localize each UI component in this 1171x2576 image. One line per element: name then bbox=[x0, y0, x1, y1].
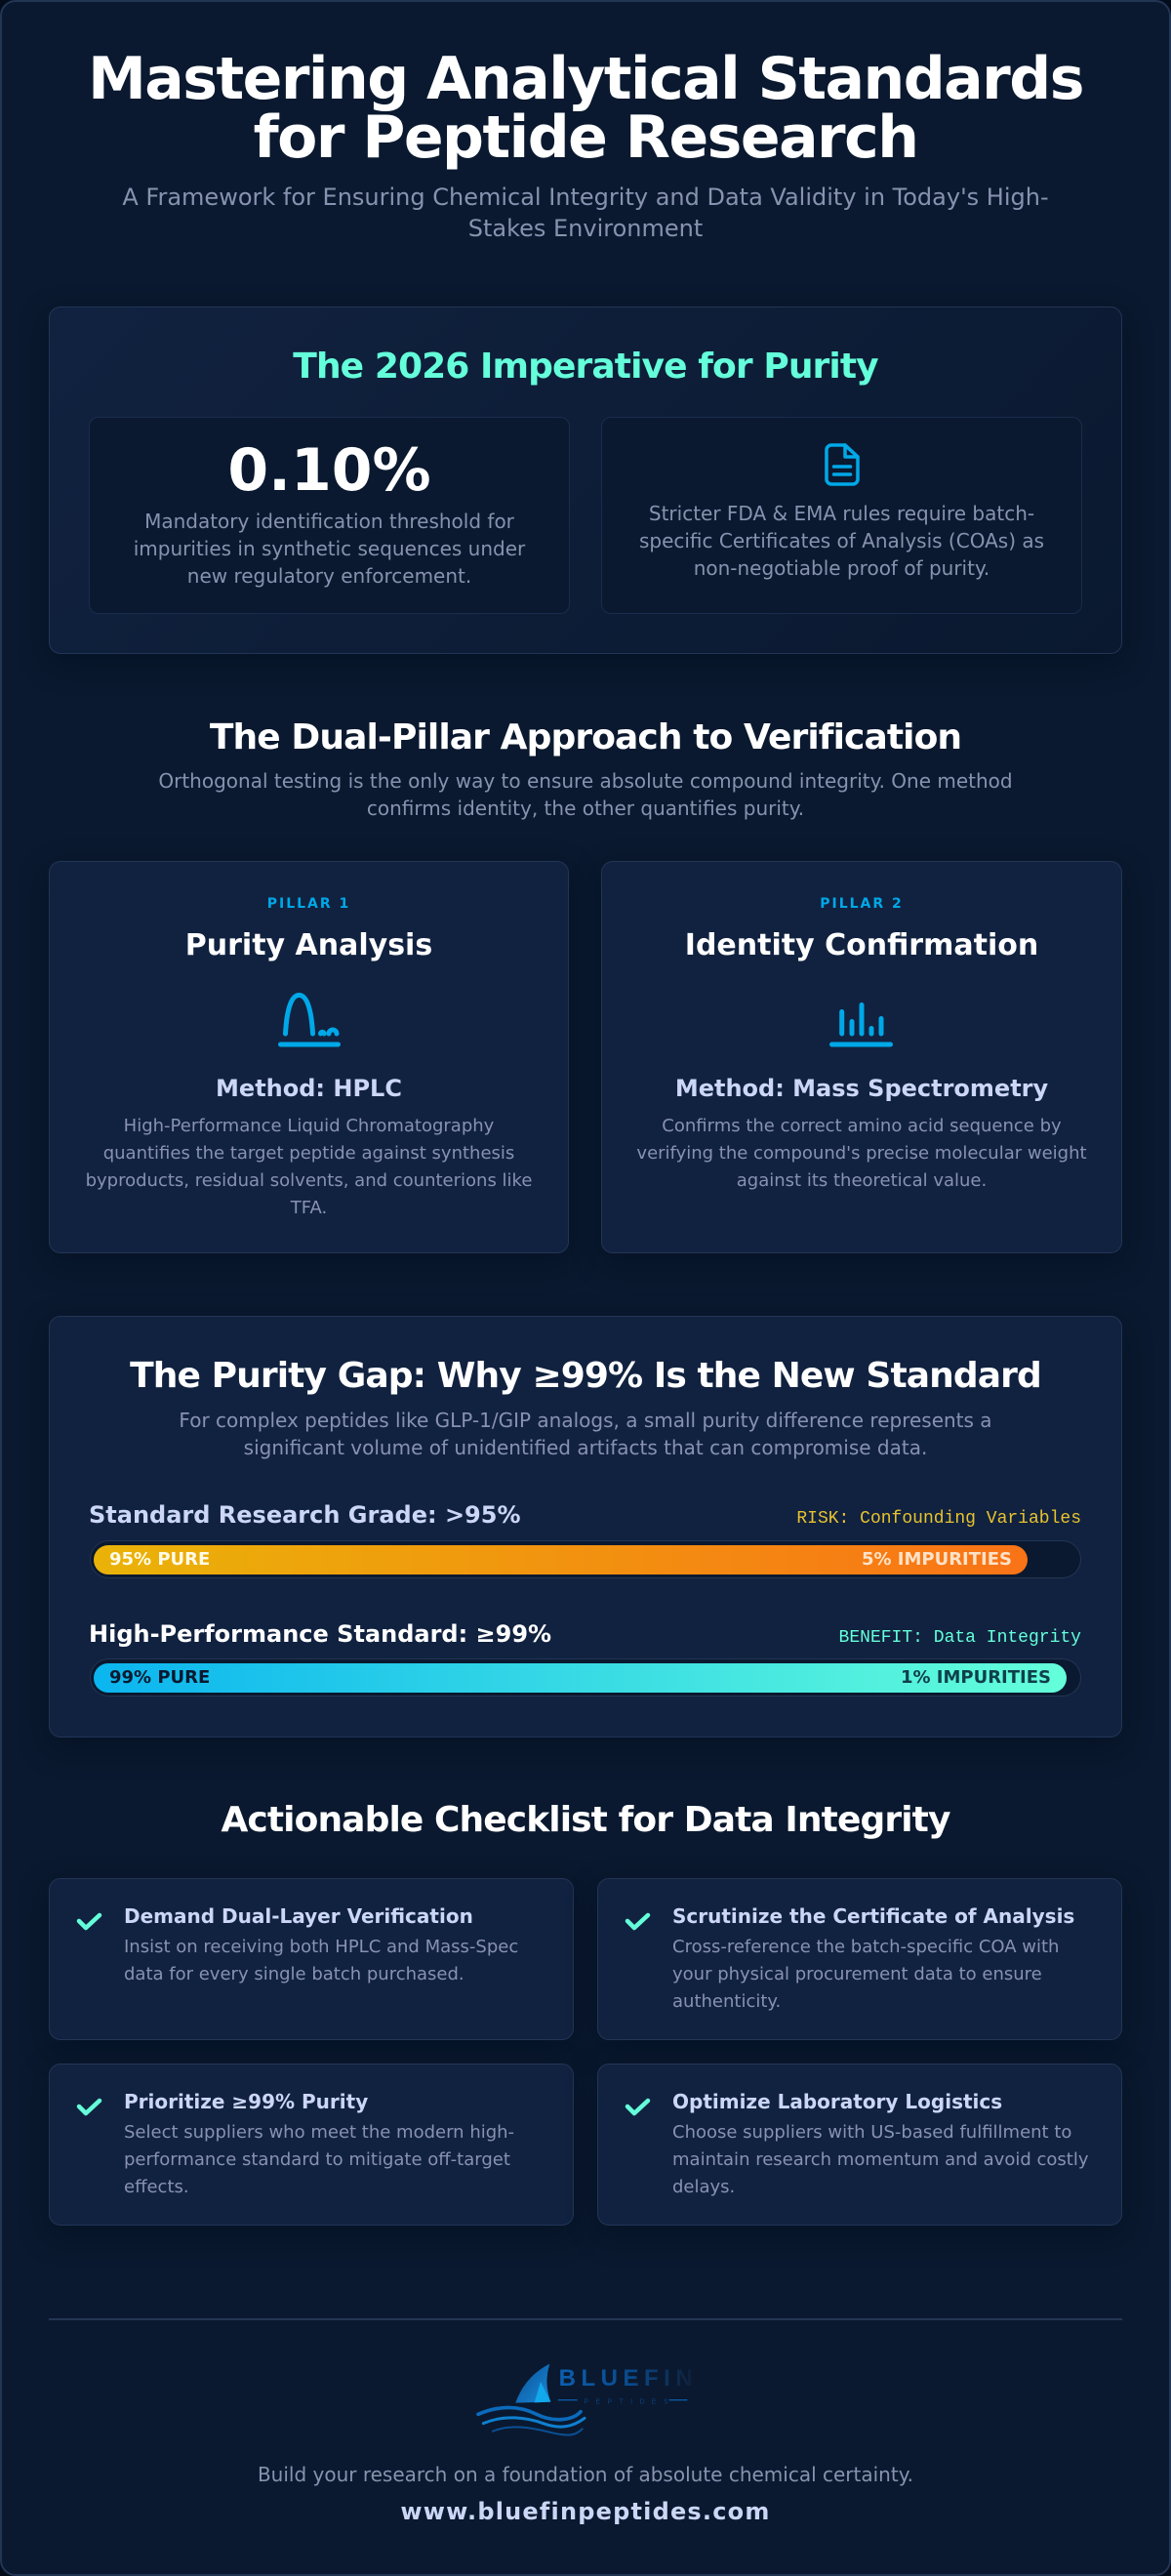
heading: identity confirmation: Identity Confirmation bbox=[685, 928, 1038, 962]
text: dual pillar intro: confirms identity, the other quantifies purity. bbox=[367, 797, 804, 820]
logo: Bluefin Peptides bbox=[476, 2364, 698, 2436]
text: COA description bbox=[639, 502, 1044, 580]
label: standard research grade: Standard Research Grade: >95% bbox=[89, 1501, 521, 1529]
checklist card: certificate of analysis bbox=[597, 1878, 1122, 2040]
card: COA requirement bbox=[601, 417, 1082, 614]
icon: check bbox=[625, 2099, 650, 2116]
panel: pillar 2 bbox=[601, 861, 1122, 1253]
icon: mass spectrum bars bbox=[829, 1002, 893, 1046]
item text: Cross-reference the batch-specific COA with bbox=[672, 1937, 1059, 1957]
logo: Bluefin Peptides: PEPTIDES bbox=[584, 2397, 675, 2406]
item title: Demand Dual-Layer Verification bbox=[124, 1904, 473, 1928]
item text: data for every single batch purchased. bbox=[124, 1964, 464, 1984]
title: for Peptide Research bbox=[254, 103, 917, 172]
label: pillar 2: PILLAR 2 bbox=[820, 896, 904, 912]
subtitle bbox=[122, 184, 1049, 242]
text: HPLC description: TFA. bbox=[291, 1198, 327, 1218]
item text bbox=[672, 1937, 1059, 2012]
checklist card: dual-layer verification bbox=[49, 1878, 574, 2040]
text: purity gap intro: significant volume of unidentified artifacts that can compromise data. bbox=[244, 1436, 927, 1459]
text: COA description: specific Certificates of Analysis (COAs) as bbox=[639, 529, 1044, 552]
text: HPLC description: byproducts, residual solvents, and counterions like bbox=[86, 1170, 532, 1191]
text: HPLC description bbox=[86, 1116, 532, 1218]
item title: Optimize Laboratory Logistics bbox=[672, 2090, 1002, 2113]
text: threshold description: new regulatory enforcement. bbox=[187, 564, 471, 588]
checklist card: purity priority bbox=[49, 2064, 574, 2226]
icon: check bbox=[76, 2099, 101, 2116]
icon: check bbox=[76, 1913, 101, 1931]
bar label: 99% pure: 99% PURE bbox=[109, 1667, 210, 1688]
text: mass spectrometry description: verifying the compound's precise molecular weight bbox=[636, 1143, 1087, 1164]
checklist card: laboratory logistics bbox=[597, 2064, 1122, 2226]
text: HPLC description: quantifies the target peptide against synthesis bbox=[103, 1143, 514, 1164]
subheading: HPLC: Method: HPLC bbox=[216, 1075, 402, 1102]
item text: delays. bbox=[672, 2177, 735, 2197]
icon: document bbox=[825, 443, 860, 486]
subheading: mass spectrometry: Method: Mass Spectrometry bbox=[675, 1075, 1048, 1102]
text: COA description: non-negotiable proof of purity. bbox=[694, 556, 989, 580]
panel: pillar 1 bbox=[49, 861, 569, 1253]
bar: 99% pure bbox=[90, 1658, 1081, 1697]
title: Mastering Analytical Standards bbox=[88, 45, 1083, 113]
text: mass spectrometry description: Confirms the correct amino acid sequence by bbox=[662, 1116, 1062, 1136]
text: mass spectrometry description: against its theoretical value. bbox=[737, 1170, 987, 1191]
item text: effects. bbox=[124, 2177, 189, 2197]
text: purity gap intro bbox=[179, 1409, 992, 1459]
website url: www.bluefinpeptides.com bbox=[400, 2498, 771, 2525]
label: risk: RISK: Confounding Variables bbox=[796, 1509, 1081, 1529]
text: threshold description: impurities in synthetic sequences under bbox=[134, 537, 525, 560]
subtitle: Stakes Environment bbox=[468, 215, 703, 242]
bar fill: 99% bbox=[94, 1663, 1067, 1693]
text: dual pillar intro bbox=[158, 769, 1013, 820]
item text bbox=[124, 1937, 518, 1984]
bar label: 1% impurities: 1% IMPURITIES bbox=[901, 1667, 1051, 1688]
title bbox=[88, 45, 1083, 172]
item text bbox=[124, 2122, 514, 2197]
subtitle: A Framework for Ensuring Chemical Integrity and Data Validity in Today's High- bbox=[122, 184, 1049, 211]
item text: maintain research momentum and avoid costly bbox=[672, 2149, 1089, 2170]
label: high-performance standard: High-Performance Standard: ≥99% bbox=[89, 1620, 551, 1648]
text: threshold description: Mandatory identification threshold for bbox=[144, 510, 514, 533]
card: threshold stat bbox=[89, 417, 570, 614]
icon: check bbox=[625, 1913, 650, 1931]
bar label: 5% impurities: 5% IMPURITIES bbox=[862, 1549, 1012, 1570]
text: purity gap intro: For complex peptides like GLP-1/GIP analogs, a small purity difference represents a bbox=[179, 1409, 992, 1432]
text: HPLC description: High-Performance Liquid Chromatography bbox=[124, 1116, 494, 1136]
panel: 2026 imperative bbox=[49, 307, 1122, 654]
heading: dual pillar: The Dual-Pillar Approach to Verification bbox=[210, 717, 961, 757]
item text: Insist on receiving both HPLC and Mass-Spec bbox=[124, 1937, 518, 1957]
item text: authenticity. bbox=[672, 1991, 781, 2012]
text: dual pillar intro: Orthogonal testing is the only way to ensure absolute compound integrity. One method bbox=[158, 769, 1013, 793]
text: COA description: Stricter FDA & EMA rules require batch- bbox=[649, 502, 1034, 525]
heading: purity analysis: Purity Analysis bbox=[185, 928, 432, 962]
item text: your physical procurement data to ensure bbox=[672, 1964, 1042, 1984]
item text bbox=[672, 2122, 1089, 2197]
panel: purity gap bbox=[49, 1316, 1122, 1738]
label: pillar 1: PILLAR 1 bbox=[267, 896, 350, 912]
bar label: 95% pure: 95% PURE bbox=[109, 1549, 210, 1570]
text: mass spectrometry description bbox=[636, 1116, 1087, 1191]
item text: Select suppliers who meet the modern high- bbox=[124, 2122, 514, 2143]
item text: performance standard to mitigate off-target bbox=[124, 2149, 510, 2170]
heading: 2026 imperative: The 2026 Imperative for Purity bbox=[293, 347, 878, 387]
icon: chromatogram peak bbox=[278, 993, 341, 1046]
stat: 0.10%: 0.10% bbox=[227, 436, 431, 505]
item text: Choose suppliers with US-based fulfillment to bbox=[672, 2122, 1071, 2143]
bar: 95% pure bbox=[90, 1540, 1081, 1578]
bar fill: 95% bbox=[94, 1545, 1028, 1574]
label: benefit: BENEFIT: Data Integrity bbox=[839, 1628, 1081, 1648]
logo: Bluefin Peptides: BLUEFIN bbox=[559, 2365, 698, 2392]
heading: checklist: Actionable Checklist for Data Integrity bbox=[221, 1800, 950, 1840]
heading: purity gap: The Purity Gap: Why ≥99% Is the New Standard bbox=[130, 1356, 1041, 1396]
tagline: Build your research on a foundation of absolute chemical certainty. bbox=[258, 2463, 913, 2486]
text: threshold description bbox=[134, 510, 525, 588]
item title: Scrutinize the Certificate of Analysis bbox=[672, 1904, 1074, 1928]
item title: Prioritize ≥99% Purity bbox=[124, 2090, 368, 2113]
